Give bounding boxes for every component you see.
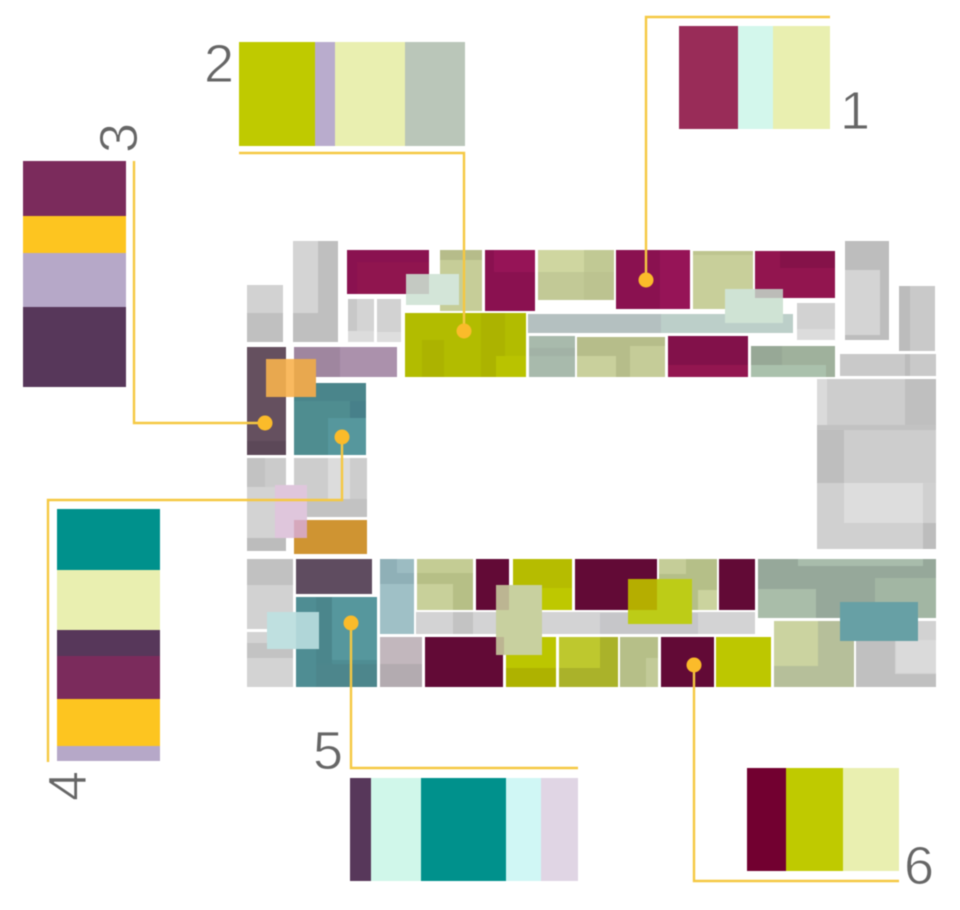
number 2: 2 [204, 34, 234, 94]
palette 1 [679, 26, 830, 129]
translucent overlay squares [266, 274, 918, 655]
tile group: second row [405, 313, 835, 377]
tile group: left column [247, 347, 397, 554]
mosaic: colored tile frame [247, 241, 936, 687]
tile group: bottom lower row [425, 637, 771, 687]
palette 5 [350, 778, 578, 881]
number 6: 6 [904, 836, 934, 896]
number 1: 1 [840, 81, 870, 141]
tile group: bottom right [758, 559, 936, 687]
palette 6 [747, 768, 899, 871]
tile group: top row [347, 250, 835, 311]
number 3: 3 [89, 123, 149, 153]
tile group: top right grays [797, 241, 936, 376]
number 4: 4 [38, 771, 98, 801]
tile group: top left grays [247, 241, 401, 342]
tile group: bottom left [247, 559, 422, 687]
palette 2 [239, 42, 465, 146]
palette 3 [23, 161, 126, 387]
palette 4 [57, 509, 160, 761]
tile group: bottom upper row [416, 559, 755, 634]
number 5: 5 [313, 721, 343, 781]
tile: large gray right block [817, 379, 936, 549]
